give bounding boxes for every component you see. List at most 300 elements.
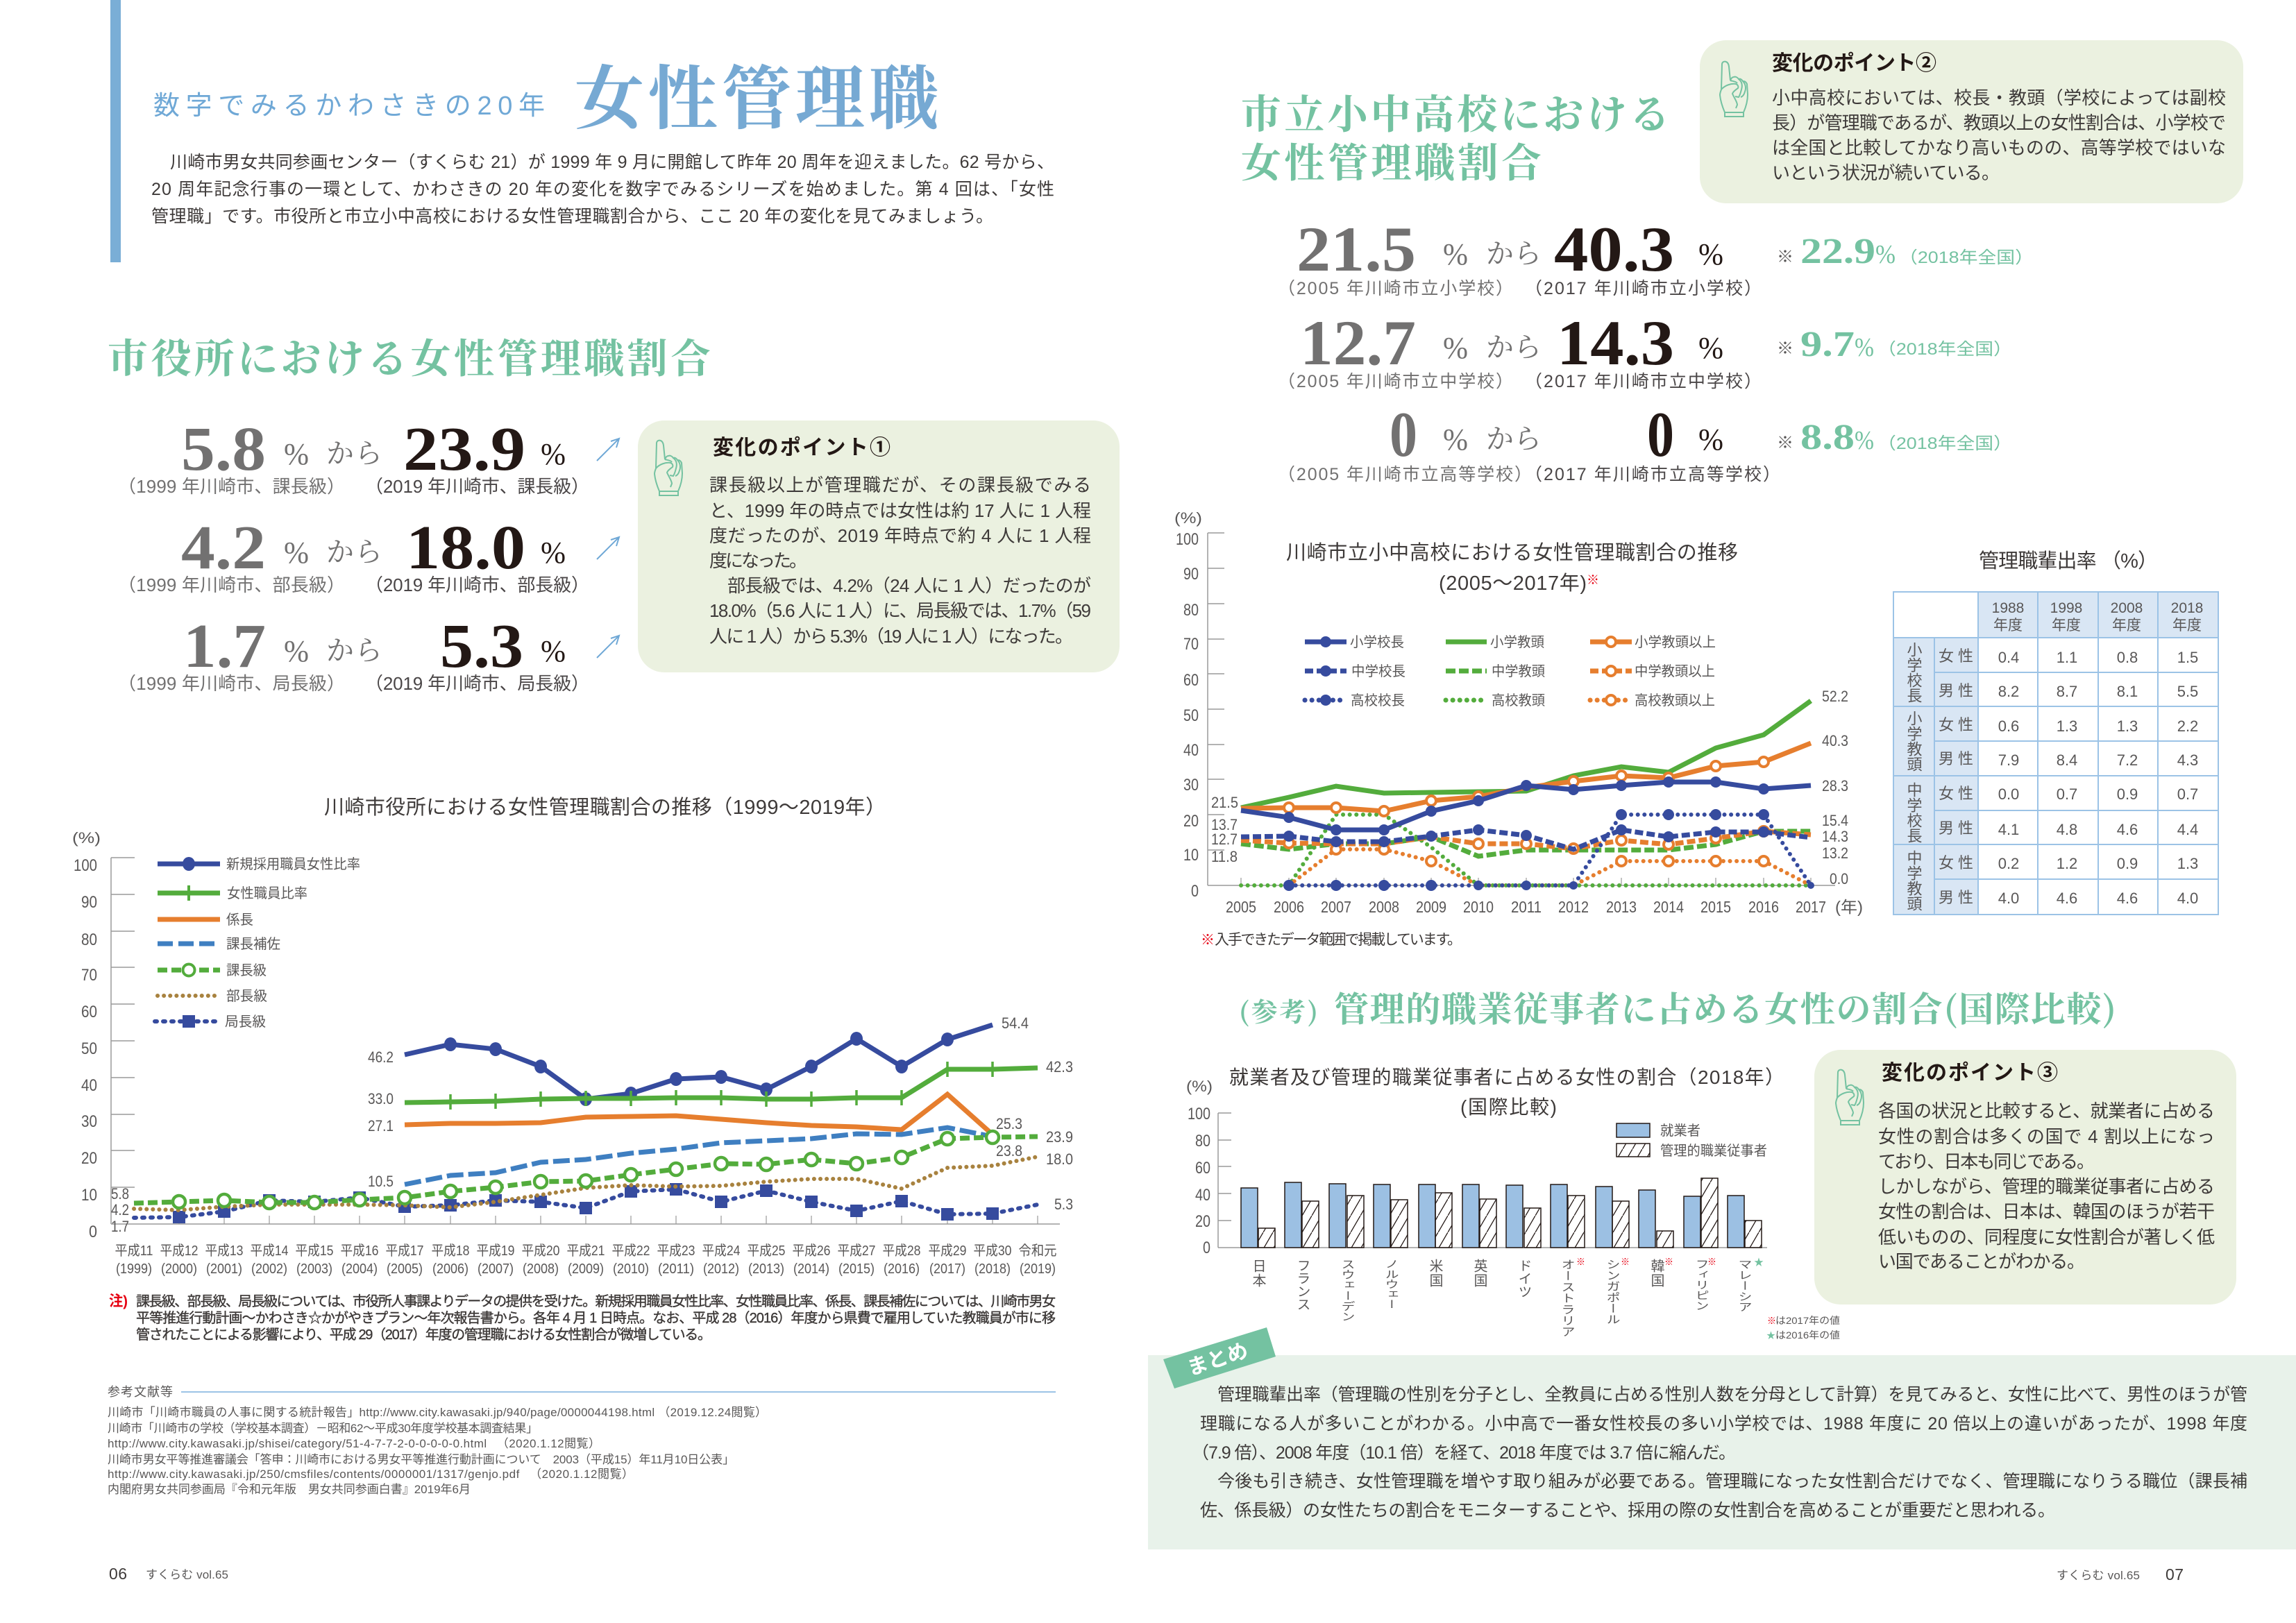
series: high school vice principals [1241, 815, 1811, 885]
summary tag: まとめ [1185, 1339, 1251, 1380]
panel text: 度だったのが、2019 年時点で約 4 人に 1 人程 [709, 525, 1091, 546]
stat row: department chief: から [326, 530, 382, 570]
x axis labels: (2000) [161, 1261, 197, 1277]
row headers: 女 性 [1939, 716, 1973, 733]
x axis labels: 平成20 [522, 1243, 559, 1259]
stat row: bureau chief: （1999 年川崎市、局長級） [118, 673, 345, 694]
table values: 4.0 [2177, 890, 2198, 907]
footer right: すくらむ vol.65 [2057, 1569, 2140, 1582]
legend [1617, 1123, 1767, 1159]
table values: 1.5 [2177, 649, 2198, 666]
panel heading: 変化のポイント③ [1882, 1062, 2058, 1085]
table header: 年度 [2112, 618, 2141, 634]
row headers: 中学教頭 [1905, 850, 1923, 911]
heading: schools: 女性管理職割合 [1241, 130, 1542, 189]
x axis labels: 平成30 [973, 1243, 1012, 1259]
legend: 局長級 [225, 1014, 266, 1030]
stat row: bureau chief [118, 612, 619, 694]
chart title: 川崎市立小中高校における女性管理職割合の推移 [1286, 541, 1738, 564]
panel text: 度になった。 [709, 550, 807, 571]
table values: 0.9 [2117, 785, 2138, 803]
note: 平等推進行動計画～かわさき☆かがやきプラン～年次報告書から。各年 4 月 1 日時点。なお、平成 28（2016）年度から県費で雇用していた教職員が市に移 [136, 1310, 1056, 1326]
intro text: 川崎市男女共同参画センター（すくらむ 21）が 1999 年 9 月に開館して昨年 20 周年を迎えました。62 号から、 [170, 153, 1054, 172]
x axis labels: 2007 [1321, 898, 1351, 916]
summary text [1192, 1385, 2247, 1520]
table values: 4.6 [2057, 890, 2077, 907]
x axis labels: 2013 [1606, 898, 1637, 916]
country labels: ★ [1754, 1257, 1764, 1268]
data labels: 1.7 [111, 1218, 129, 1235]
axes: 0 [1203, 1239, 1210, 1257]
stat row: elementary: ※ [1777, 248, 1793, 266]
axes [1188, 1105, 1767, 1257]
panel text: ており、日本も同じである。 [1878, 1151, 2095, 1172]
stat row: department chief: 4.2 [181, 513, 266, 582]
y unit: (%) [1174, 509, 1202, 527]
legend: 就業者 [1660, 1123, 1700, 1139]
panel text: い国であることがわかる。 [1878, 1251, 2085, 1272]
x axis labels: (2001) [206, 1261, 242, 1277]
x axis labels: 2010 [1463, 898, 1494, 916]
bar chart notes: ★ [1766, 1330, 1775, 1341]
series: elementary vice principals [1241, 701, 1811, 808]
x axis labels: 平成15 [296, 1243, 333, 1259]
data labels: 18.0 [1046, 1150, 1073, 1168]
data labels: 46.2 [368, 1048, 394, 1066]
stat row: elementary: （2018年全国） [1899, 248, 2034, 267]
x axis labels: 2015 [1700, 898, 1731, 916]
y axis: 10 [81, 1186, 97, 1205]
note: 課長級、部長級、局長級については、市役所人事課よりデータの提供を受けた。新規採用職員女性比率、女性職員比率、係長、課長補佐については、川崎市男女 [136, 1293, 1056, 1309]
stat row: elementary: % [1443, 237, 1468, 271]
panel text: 低いものの、同程度に女性割合が著しく低 [1878, 1227, 2215, 1248]
x axis labels: 2009 [1416, 898, 1446, 916]
data labels: 42.3 [1046, 1058, 1073, 1076]
data labels: 0.0 [1830, 870, 1848, 887]
stat row: junior high: % [1698, 331, 1723, 365]
stat row: junior high: （2018年全国） [1877, 340, 2012, 359]
y axis [74, 856, 1060, 1241]
y axis: 30 [81, 1112, 97, 1131]
data labels: 14.3 [1822, 828, 1848, 845]
legend [155, 856, 360, 1030]
x axis labels: 平成23 [657, 1243, 695, 1259]
stat row: elementary: （2017 年川崎市立小学校） [1525, 279, 1762, 298]
table values: 7.9 [1998, 751, 2019, 769]
chart title: 川崎市役所における女性管理職割合の推移（1999～2019年） [324, 796, 886, 819]
summary text: 佐、係長級）の女性たちの割合をモニターすることや、採用の際の女性割合を高めることが重要だと思われる。 [1200, 1501, 2055, 1520]
table values: 5.5 [2177, 683, 2198, 700]
panel text: しかしながら、管理的職業従事者に占める [1878, 1176, 2215, 1197]
table values: 0.0 [1998, 785, 2019, 803]
panel text: 女性の割合は多くの国で 4 割以上になっ [1878, 1126, 2215, 1147]
axes: 100 [1188, 1105, 1210, 1123]
row headers: 男 性 [1939, 682, 1973, 699]
row headers: 小学教頭 [1905, 711, 1923, 772]
bar chart: international comparison [1186, 1067, 1840, 1341]
x axis labels: 2017 [1796, 898, 1826, 916]
y axis: 0 [89, 1223, 97, 1241]
x axis labels: (2002) [251, 1261, 287, 1277]
x axis labels: 平成26 [793, 1243, 830, 1259]
table values: 0.7 [2177, 785, 2198, 803]
data labels: 12.7 [1211, 831, 1238, 848]
x axis labels: (2018) [974, 1261, 1011, 1277]
table values: 0.4 [1998, 649, 2019, 666]
data labels: 27.1 [368, 1117, 394, 1135]
intro text [151, 153, 1054, 226]
heading: city hall: 市役所における女性管理職割合 [108, 326, 711, 384]
chart title: ※ [1587, 573, 1599, 587]
references heading: 参考文献等 [108, 1385, 173, 1399]
axes: 100 [1176, 530, 1199, 549]
data labels [111, 1014, 1073, 1235]
table header: 年度 [1993, 618, 2023, 634]
stat row: high school: （2017 年川崎市立高等学校） [1525, 465, 1780, 484]
axes: 20 [1183, 812, 1199, 831]
row headers: 女 性 [1939, 854, 1973, 872]
bar chart notes: は2016年の値 [1775, 1329, 1840, 1341]
row headers: 女 性 [1939, 785, 1973, 802]
heading: schools: 市立小中高校における [1241, 82, 1670, 140]
table values: 0.2 [1998, 855, 2019, 872]
table values: 7.2 [2117, 751, 2138, 769]
panel text: 課長級以上が管理職だが、その課長級でみる [709, 475, 1091, 495]
summary text: 今後も引き続き、女性管理職を増やす取り組みが必要である。管理職になった女性割合だけでなく、管理職になりうる職位（課長補 [1217, 1472, 2247, 1491]
x axis labels: 平成27 [837, 1243, 876, 1259]
legend: 高校校長 [1351, 692, 1405, 708]
stat row: high school: % [1855, 426, 1874, 455]
axes: 80 [1183, 601, 1199, 620]
series: high school vice principals and above [1289, 844, 1811, 885]
series: junior high vice principals and above [1241, 826, 1811, 853]
stat row: bureau chief: から [326, 629, 382, 668]
x axis labels: (2010) [613, 1261, 649, 1277]
table header: 2018 [2171, 600, 2203, 616]
references: http://www.city.kawasaki.jp/shisei/category/51-4-7-7-2-0-0-0-0-0.html （2020.1.12閲覧） [108, 1437, 600, 1450]
stat row: department chief [118, 513, 619, 595]
y unit: (%) [72, 829, 101, 847]
references: http://www.city.kawasaki.jp/250/cmsfiles/contents/0000001/1317/genjo.pdf （2020.1.12閲覧） [108, 1468, 634, 1481]
series: bureau chief [134, 1183, 1038, 1223]
row headers: 中学校長 [1905, 782, 1923, 843]
series: department chief [134, 1157, 1038, 1210]
country labels: マレーシア [1736, 1259, 1751, 1312]
x axis labels: 平成17 [386, 1243, 423, 1259]
legend: 課長補佐 [226, 936, 280, 952]
chart title: (国際比較) [1460, 1096, 1557, 1118]
data labels: 52.2 [1822, 688, 1848, 705]
summary tag [1163, 1327, 1276, 1388]
table values: 8.7 [2057, 683, 2077, 700]
y axis: 50 [81, 1039, 97, 1058]
x axis labels: 2014 [1653, 898, 1684, 916]
stat row: high school: から [1486, 417, 1542, 457]
data labels: 10.5 [368, 1173, 394, 1190]
heading: international comparison: (参考) [1239, 991, 1318, 1029]
footer left: すくらむ vol.65 [146, 1568, 228, 1581]
axes: 20 [1195, 1212, 1210, 1231]
table values: 4.3 [2177, 751, 2198, 769]
references: 川崎市男女平等推進審議会「答申：川崎市における男女平等推進行動計画について 2003（平成15）年11月10日公表」 [108, 1452, 734, 1466]
panel: summary [1148, 1327, 2296, 1549]
x axis labels: 2006 [1274, 898, 1304, 916]
x axis labels: 平成11 [115, 1243, 153, 1259]
table values: 0.7 [2057, 785, 2077, 803]
data labels: 33.0 [368, 1090, 394, 1107]
axes: 0 [1191, 882, 1199, 901]
row headers: 小学校長 [1905, 642, 1923, 703]
legend: 小学教頭 [1490, 634, 1544, 650]
panel heading: 変化のポイント① [713, 436, 890, 459]
table values: 0.9 [2117, 855, 2138, 872]
panel text [709, 475, 1091, 647]
data labels: 23.8 [996, 1142, 1022, 1159]
x axis labels: (2005) [387, 1261, 423, 1277]
legend: 管理的職業従事者 [1660, 1143, 1767, 1159]
stat row: high school: 0 [1390, 399, 1417, 470]
x axis labels: 2016 [1748, 898, 1779, 916]
country labels: スウェーデン [1339, 1259, 1354, 1322]
table values: 8.1 [2117, 683, 2138, 700]
intro text: 20 周年記念行事の一環として、かわさきの 20 年の変化を数字でみるシリーズを始めました。第 4 回は、「女性 [151, 180, 1054, 199]
y axis: 40 [81, 1076, 97, 1095]
x axis labels: (2016) [884, 1261, 920, 1277]
legend [1305, 634, 1716, 708]
stat row: high school: 0 [1647, 399, 1674, 470]
row headers: 男 性 [1939, 889, 1973, 906]
footer right: 07 [2166, 1565, 2184, 1583]
main title: 女性管理職 [575, 43, 940, 143]
country labels: 米国 [1427, 1259, 1443, 1287]
axes: 10 [1183, 846, 1199, 865]
x axis labels: (2003) [296, 1261, 332, 1277]
stat row: section chief: （2019 年川崎市、課長級） [365, 476, 589, 497]
accent bar: title [110, 0, 121, 262]
bars [1241, 1178, 1762, 1248]
legend: 高校教頭以上 [1635, 692, 1715, 708]
y axis: 70 [81, 966, 97, 985]
table header: 年度 [2052, 618, 2081, 634]
references: 川崎市「川崎市の学校（学校基本調査）－昭和62～平成30年度学校基本調査結果」 [108, 1422, 538, 1435]
stat row: elementary: % [1698, 237, 1723, 271]
axes: 40 [1183, 741, 1199, 760]
stat row: junior high: 14.3 [1557, 307, 1674, 378]
references [108, 1385, 1056, 1496]
legend: 中学校長 [1351, 663, 1406, 679]
stat row: department chief: % [541, 536, 566, 570]
stat row: elementary: 22.9 [1800, 232, 1875, 271]
x axis labels: 平成21 [566, 1243, 605, 1259]
x axis labels: 平成13 [205, 1243, 243, 1259]
table values: 4.4 [2177, 821, 2198, 838]
data labels: 11.8 [1211, 848, 1238, 865]
heading: international comparison: 管理的職業従事者に占める女性の割合(国際比較) [1334, 982, 2116, 1032]
series: junior high vice principals [1241, 831, 1811, 856]
x axis labels: 平成24 [702, 1243, 740, 1259]
axes: 30 [1183, 776, 1199, 794]
legend: 係長 [226, 912, 253, 928]
axes: 40 [1195, 1186, 1210, 1205]
x axis labels: (2013) [748, 1261, 784, 1277]
chart note: ※ [1201, 933, 1215, 948]
summary text: 理職になる人が多いことがわかる。小中高で一番女性校長の多い小学校では、1988 年度に 20 倍以上の違いがあったが、1998 年度 [1200, 1414, 2247, 1434]
stat row: section chief: 5.8 [181, 415, 266, 484]
bar chart notes [1766, 1315, 1840, 1341]
y axis: 100 [74, 856, 97, 875]
x axis labels: (2019) [1020, 1261, 1056, 1277]
panel text: 人に 1 人）から 5.3%（19 人に 1 人）になった。 [709, 626, 1073, 647]
x axis labels: (2012) [703, 1261, 739, 1277]
data labels: 28.3 [1822, 777, 1848, 794]
x axis labels [115, 1243, 1056, 1277]
stats: schools [1278, 214, 2034, 484]
stat row: section chief: % [284, 437, 309, 471]
legend: 小学校長 [1350, 634, 1404, 650]
stat row: junior high: （2005 年川崎市立中学校） [1278, 372, 1513, 391]
chart title [1286, 541, 1738, 595]
x axis labels: 2008 [1369, 898, 1399, 916]
table values: 1.2 [2057, 855, 2077, 872]
stats: city hall [118, 415, 619, 694]
country labels: ※ [1576, 1257, 1585, 1267]
row headers: 女 性 [1939, 647, 1973, 665]
panel heading: 変化のポイント② [1772, 52, 1936, 75]
country labels: ドイツ [1516, 1259, 1531, 1298]
stat row: section chief: （1999 年川崎市、課長級） [118, 476, 345, 497]
stat row: junior high: 9.7 [1800, 325, 1855, 364]
country labels [1250, 1257, 1764, 1337]
table values: 0.8 [2117, 649, 2138, 666]
table grid [1893, 592, 2218, 915]
series: elementary vice principals and above [1241, 743, 1811, 816]
icon: pointing hand [1836, 1070, 1864, 1125]
stat row: section chief: から [326, 432, 382, 471]
country labels: フィリピン [1693, 1259, 1708, 1311]
x axis labels: 平成12 [160, 1243, 199, 1259]
x axis labels: (2008) [523, 1261, 559, 1277]
panel text: 部長級では、4.2%（24 人に 1 人）だったのが [727, 575, 1091, 596]
note [109, 1293, 1056, 1343]
stat row: bureau chief: 1.7 [183, 612, 266, 681]
stat row: department chief: （1999 年川崎市、部長級） [118, 575, 345, 595]
x axis labels: 平成28 [883, 1243, 920, 1259]
x axis labels: (1999) [116, 1261, 152, 1277]
stat row: junior high: ※ [1777, 339, 1793, 358]
icon: pointing hand [1720, 62, 1748, 117]
x axis labels: 平成25 [747, 1243, 786, 1259]
x axis labels: 平成14 [250, 1243, 289, 1259]
stat row: bureau chief: % [541, 634, 566, 668]
data labels [1211, 688, 1848, 887]
chart note: 入手できたデータ範囲で掲載しています。 [1215, 932, 1462, 948]
x axis labels: 2005 [1226, 898, 1256, 916]
x axis labels: 2012 [1558, 898, 1589, 916]
panel text: いという状況が続いている。 [1772, 162, 2000, 183]
panel text [1772, 87, 2226, 183]
x axis labels: 平成29 [929, 1243, 966, 1259]
stat row: elementary: 40.3 [1554, 214, 1674, 284]
table header: 1988 [1992, 600, 2024, 616]
legend: 新規採用職員女性比率 [226, 856, 360, 872]
data labels: 21.5 [1211, 794, 1238, 811]
table title: 管理職輩出率 （%） [1979, 550, 2158, 572]
title block [153, 43, 940, 143]
note: 管されたことによる影響により、平成 29（2017）年度の管理職における女性割合が微増している。 [136, 1327, 711, 1343]
table header: 2008 [2111, 600, 2143, 616]
table values: 1.1 [2057, 649, 2077, 666]
icon: pointing hand [655, 441, 682, 495]
table values: 4.1 [1998, 821, 2019, 838]
stat row: department chief: % [284, 536, 309, 570]
panel text: は全国と比較してかなり高いものの、高等学校ではいな [1772, 137, 2226, 158]
stat row: high school: % [1698, 423, 1723, 457]
intro text: 管理職」です。市役所と市立小中高校における女性管理職割合から、ここ 20 年の変化を見てみましょう。 [151, 207, 993, 226]
table values: 1.3 [2057, 717, 2077, 735]
legend: 小学教頭以上 [1635, 634, 1716, 650]
panel text: 小中高校においては、校長・教頭（学校によっては副校 [1772, 87, 2226, 108]
table values: 8.2 [1998, 683, 2019, 700]
x axis labels: (2015) [838, 1261, 875, 1277]
stat row: high school [1278, 399, 2012, 484]
references: 内閣府男女共同参画局『令和元年版 男女共同参画白書』2019年6月 [108, 1483, 471, 1496]
stat row: elementary: から [1486, 232, 1542, 271]
y axis: 60 [81, 1003, 97, 1021]
table values: 4.8 [2057, 821, 2077, 838]
table header: 1998 [2050, 600, 2082, 616]
data labels: 4.2 [111, 1201, 129, 1218]
references: 川崎市「川崎市職員の人事に関する統計報告」http://www.city.kawasaki.jp/940/page/0000044198.html （2019.12.24閲覧） [108, 1406, 767, 1419]
chart title [1229, 1067, 1784, 1118]
table values: 0.6 [1998, 717, 2019, 735]
data labels: 13.7 [1211, 816, 1238, 833]
panel text: 各国の状況と比較すると、就業者に占める [1878, 1101, 2215, 1121]
country labels: 英国 [1471, 1259, 1487, 1287]
country labels: シンガポール [1604, 1259, 1619, 1325]
table header [1992, 600, 2203, 634]
country labels: ノルウェー [1383, 1259, 1398, 1309]
y axis: 80 [81, 931, 97, 949]
x axis labels: (2017) [929, 1261, 965, 1277]
footer right [2057, 1565, 2184, 1583]
table header: 年度 [2172, 618, 2202, 634]
country labels: 韓国 [1648, 1259, 1664, 1287]
country labels: ※ [1621, 1257, 1630, 1267]
panel text [1878, 1101, 2215, 1272]
x axis labels: (2006) [432, 1261, 469, 1277]
stat row: high school: 8.8 [1800, 418, 1855, 457]
summary text: 管理職輩出率（管理職の性別を分子とし、全教員に占める性別人数を分母として計算）を見てみると、女性に比べて、男性のほうが管 [1217, 1385, 2247, 1404]
stat row: high school: （2018年全国） [1877, 434, 2012, 453]
data labels: 15.4 [1822, 812, 1848, 829]
country labels: オーストラリア [1559, 1259, 1574, 1337]
heading: schools [1241, 82, 1670, 189]
axes: 80 [1195, 1132, 1210, 1150]
table values [1998, 649, 2198, 907]
axes: 60 [1195, 1159, 1210, 1178]
panel: point 1 [638, 420, 1120, 672]
x axis labels: (2011) [658, 1261, 694, 1277]
axes: 90 [1183, 565, 1199, 584]
legend: 女性職員比率 [227, 885, 307, 901]
panel: point 2 [1700, 40, 2243, 203]
stat row: department chief: （2019 年川崎市、部長級） [365, 575, 589, 595]
x axis labels: 平成22 [612, 1243, 650, 1259]
panel text: 18.0%（5.6 人に 1 人）に、局長級では、1.7%（59 [709, 600, 1091, 621]
data labels: 54.4 [1002, 1014, 1029, 1032]
table values: 1.3 [2117, 717, 2138, 735]
table values: 4.0 [1998, 890, 2019, 907]
